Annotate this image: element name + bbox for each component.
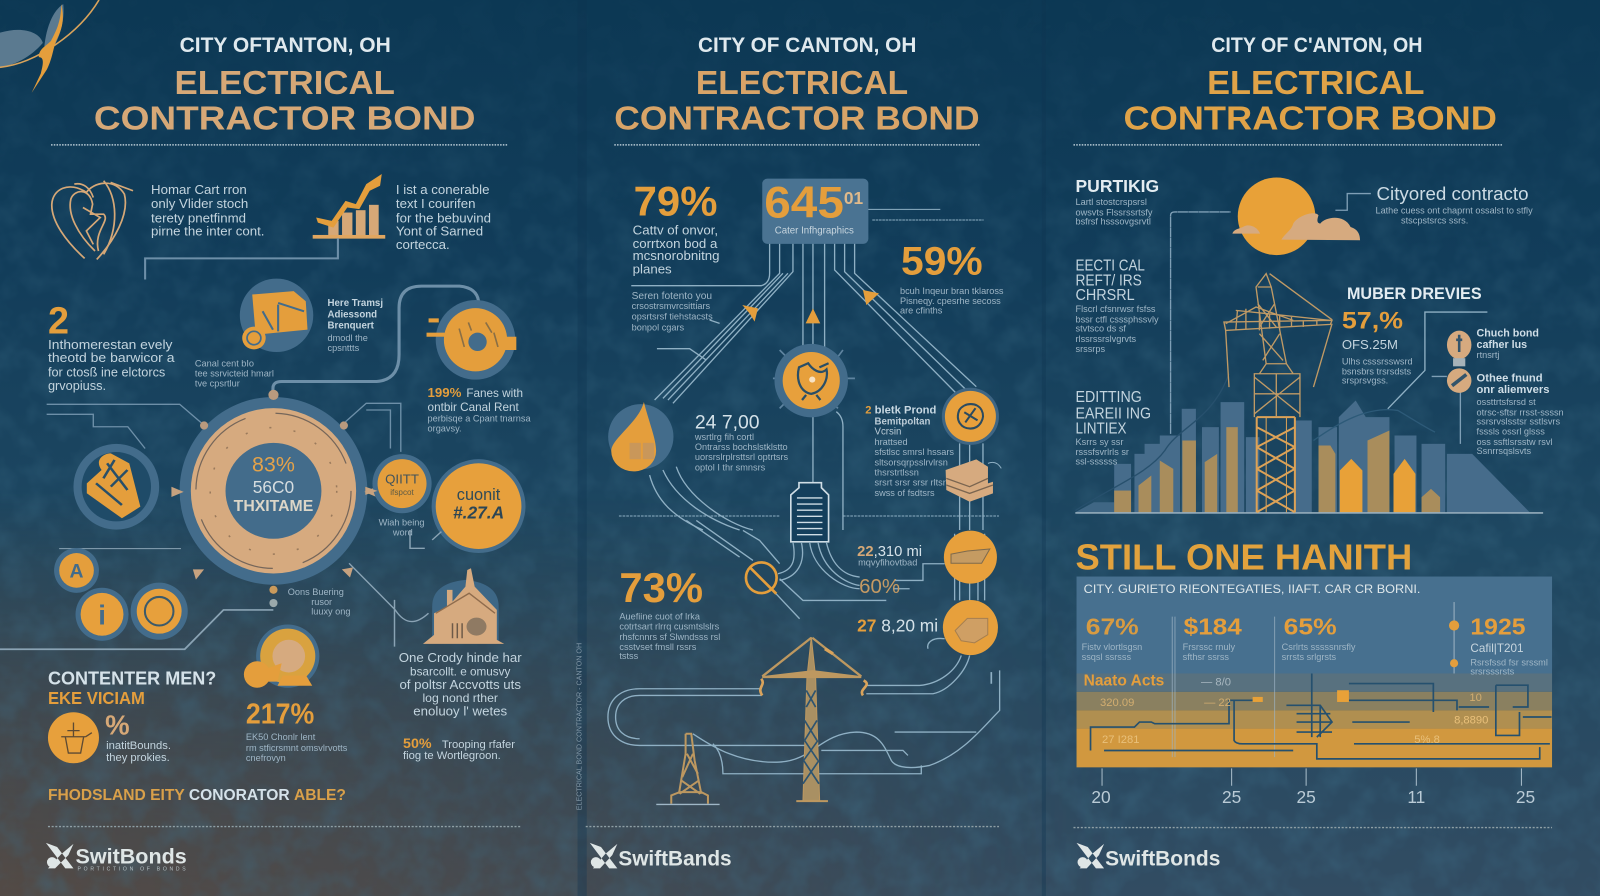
logo: SwiftBands — [618, 846, 732, 870]
icon: info badge — [76, 588, 129, 641]
stat: percent: % — [105, 710, 130, 741]
stat: percent — [105, 710, 171, 764]
stat: 67%: 67% — [1086, 614, 1139, 640]
table row labels: 5%.8 — [1414, 734, 1440, 746]
table row labels: 27 I281 — [1102, 734, 1139, 746]
icon: center rooster badge — [774, 344, 848, 417]
stat: 73%: Auefiine cuot of lrka — [619, 611, 701, 621]
text block: bletk prond: srsrt srsr srsr rltsr — [874, 478, 946, 488]
text block: other found: onr aliemvers — [1477, 384, 1549, 396]
icon: corner wing — [0, 0, 99, 93]
stat: 217%: EK50 Chonlr lent — [246, 732, 316, 742]
heading: cityored contracto: Cityored contracto — [1377, 183, 1529, 204]
callout box: 645: 01 — [844, 188, 864, 208]
stat: 73% — [619, 564, 720, 661]
text block: seren: Seren fotento you — [632, 291, 712, 302]
icon: heart outline — [52, 181, 133, 259]
chart: central ring: 56C0 — [253, 477, 294, 497]
stat: muber drevies: srsprsvgss. — [1342, 376, 1388, 386]
table subtitle: CITY. GURIETO RIEONTEGATIES, IIAFT. CAR CR BORNI. — [1084, 582, 1420, 596]
icon: A badge: A — [70, 561, 84, 583]
stat: 67% — [1082, 614, 1142, 662]
stat: 65%: srrsts srlgrsts — [1282, 652, 1337, 662]
table row labels: — 22 — [1204, 697, 1231, 709]
badge: count: #.27.A — [453, 502, 504, 522]
divider — [1073, 827, 1552, 829]
text block: canal cent: tee ssrvicteid hmarl — [195, 369, 274, 379]
stat: 24 7,00: wsrtlrg fih cortl — [694, 432, 754, 442]
stat: 2: grvopiuss. — [48, 378, 106, 393]
icon: small pylon — [656, 734, 720, 804]
callout box: 645: 645 — [764, 176, 844, 227]
text block: check bond: rtnsrtj — [1477, 350, 1499, 360]
stat: 1925: Rsrsfssd fsr srssml — [1470, 657, 1548, 667]
text block: electical: bssr ctfl csssphssvly — [1076, 314, 1159, 324]
text block: purtikig — [1076, 176, 1159, 226]
stat: 22,310: 22,310 mi — [857, 544, 922, 560]
connector lines — [47, 238, 479, 452]
icon: A badge — [54, 548, 99, 593]
stat: 73%: rhsfcnnrs sf Slwndsss rsl — [619, 632, 720, 642]
table dividers and routes — [1091, 617, 1552, 759]
callout: bottom question: FHODSLAND EITY CONORATOR ABLE? — [48, 787, 346, 804]
icon: tan boxes — [946, 459, 1001, 502]
stat: 1925: srsrsssrsts — [1470, 666, 1515, 676]
stat: percent: inatitBounds. — [106, 740, 171, 752]
text block: conerable: for the bebuvind — [396, 210, 491, 225]
stat: 59%: bcuh Inqeur bran tklaross — [900, 286, 1004, 296]
heading: vicim: EKE VICIAM — [48, 688, 145, 708]
stat: 2: Inthomerestan evely — [48, 337, 173, 352]
stat: percent: they prokies. — [106, 752, 170, 764]
text block: here tramsj: Here Tramsj — [328, 298, 383, 309]
heading: cityored contracto — [1376, 183, 1533, 225]
chart axis labels: 11 — [1407, 787, 1425, 807]
text block: other found — [1477, 373, 1564, 456]
text block: seren: bonpol cgars — [632, 323, 685, 333]
icon: house — [423, 568, 504, 644]
label: oons: rusor — [311, 597, 332, 607]
stat: 24 7,00: Ontrarss bochslstklstto — [695, 442, 788, 452]
heading: electrical: ELECTRICAL — [174, 65, 395, 102]
chart axis labels: 25 — [1222, 787, 1241, 807]
text block: bletk prond — [865, 404, 954, 498]
stat: muber drevies: MUBER DREVIES — [1347, 285, 1482, 303]
heading: city: CITY OF C'ANTON, OH — [1211, 33, 1422, 57]
icon: quit circle — [365, 454, 432, 513]
text block: conerable: cortecca. — [396, 237, 450, 252]
icon: arrows — [742, 290, 879, 323]
text block: editing: EAREII ING — [1076, 405, 1151, 422]
divider — [48, 826, 521, 828]
icon: quit circle: ifspcot — [390, 488, 415, 497]
heading: city: CITY OF CANTON, OH — [698, 33, 916, 57]
stat: 79%: planes — [633, 261, 672, 276]
connector lines — [1171, 194, 1487, 444]
badge: count — [432, 459, 526, 553]
text block: seren: crsostrsmvrcsittiars — [632, 301, 711, 311]
stat: 1925: 1925 — [1470, 614, 1526, 640]
stat: 79%: Cattv of onvor, — [633, 223, 718, 238]
stat: 50%: 50% — [403, 736, 432, 752]
table row labels: 320.09 — [1100, 697, 1134, 709]
text block: check bond: cafher lus — [1477, 339, 1527, 351]
stat: muber drevies: 57,% — [1342, 308, 1403, 335]
panel: middle — [576, 33, 1004, 870]
text block: editing: ssl-ssssss — [1076, 456, 1118, 466]
table row labels — [1084, 673, 1488, 746]
text block: other found: otrsc-sftsr rrsst-ssssn — [1477, 407, 1564, 417]
stat: $184: sfthsr ssrss — [1183, 652, 1229, 662]
text block: here tramsj: Brenquert — [328, 321, 375, 332]
text block: here tramsj: cpsnttts — [328, 343, 360, 353]
stat: muber drevies: OFS.25M — [1342, 337, 1398, 352]
text block: editing: EDITTING — [1076, 389, 1142, 406]
heading: contractor bond: CONTRACTOR BOND — [94, 101, 476, 138]
text block: bletk prond: 2 bletk Prond — [865, 404, 937, 416]
text block: canal cent: Canal cent bIo — [195, 358, 254, 368]
stat: 199% — [428, 385, 531, 434]
heading: cityored contracto: Lathe cuess ont chaprnt ossalst to stfly — [1376, 205, 1533, 215]
stat: 217%: 217% — [246, 698, 314, 730]
text block: here tramsj: dmodl the — [328, 333, 368, 343]
stat: 27 8,20: 27 8,20 mi — [857, 616, 938, 636]
stat: 59%: are cfinths — [900, 305, 943, 315]
table row labels: — 8/0 — [1201, 677, 1231, 689]
text block: check bond: Chuch bond — [1477, 328, 1539, 340]
chart: central ring: THXITAME — [234, 498, 313, 515]
icon: drop — [608, 402, 673, 471]
text block: conerable: I ist a conerable — [396, 182, 489, 197]
divider — [51, 144, 507, 146]
text block: canal cent: tve cpsrtlur — [195, 379, 240, 389]
icon: info badge: i — [98, 599, 106, 630]
stat: 73%: cotrtsart rlrrq cusmtslslrs — [619, 622, 720, 632]
icon: sun and clouds — [1232, 178, 1360, 255]
stat: 199%: 199% — [428, 385, 462, 400]
callout box: 645 — [762, 176, 868, 244]
stat: 24 7,00: uorsrslrplrsttsrl optrtsrs — [695, 452, 789, 462]
stat: 2: theotd be barwicor a — [48, 350, 175, 365]
heading: electrical: ELECTRICAL — [1207, 65, 1424, 102]
icon: orange gear — [427, 300, 516, 380]
text block: bletk prond: Vcrsin — [874, 427, 901, 438]
text block: electical: srssrps — [1076, 344, 1105, 354]
text block: one crody: enoluoy l' wetes — [413, 703, 508, 718]
heading: still one hanith: STILL ONE HANITH — [1076, 537, 1412, 577]
heading: electrical: ELECTRICAL — [696, 65, 908, 102]
stat: 2: for ctosß ine elctorcs — [48, 365, 165, 380]
text block: homar: Homar Cart rron — [151, 182, 247, 197]
stat: $184: $184 — [1184, 614, 1242, 640]
icon: bulb — [1447, 331, 1471, 366]
panel: right — [1073, 33, 1564, 870]
text block: editing: rsssfsvrlrls sr — [1076, 447, 1129, 457]
stat: 24 7,00: optol I thr smnsrs — [695, 462, 766, 472]
label: oons: Oons Buering — [288, 587, 344, 597]
text block: bletk prond: hrattsed — [874, 437, 908, 447]
stat: 217%: cnefrovyn — [246, 753, 286, 763]
logo — [590, 843, 732, 870]
stat: 24 7,00: 24 7,00 — [695, 412, 760, 434]
heading: city: CITY OFTANTON, OH — [180, 33, 391, 57]
text block: editing — [1076, 389, 1151, 466]
logo: PORTICTION OF BONDS — [78, 866, 186, 872]
vertical fine print: ELECTRICAL BOND CONTRACTOR - CANTON OH — [576, 643, 584, 810]
stat: 59% — [900, 239, 1004, 315]
stat: 79%: mcsnorobnitng — [633, 248, 720, 263]
stat: 199%: orgavsy. — [428, 424, 462, 434]
stat: 79%: corrtxon bod a — [633, 236, 718, 251]
stat: 199%: Fanes with — [466, 387, 523, 400]
divider — [614, 144, 981, 146]
label: oons — [269, 586, 350, 616]
panel: data table — [1077, 577, 1552, 767]
bar chart: skyline — [1075, 374, 1543, 513]
chart axis labels: 25 — [1516, 787, 1535, 807]
text block: conerable — [396, 182, 491, 252]
chart axis labels — [1091, 768, 1535, 807]
stat: muber drevies: bsnsbrs trsrsdsts — [1342, 366, 1412, 376]
icon: stack circle — [73, 444, 159, 530]
text block: purtikig: PURTIKIG — [1076, 176, 1159, 196]
text block: bletk prond: swss of fsdtsrs — [874, 488, 935, 498]
diagram lines: lower network — [608, 520, 1000, 774]
stat: 65% — [1282, 614, 1356, 662]
text block: electical: rlssrssrslvgrvts — [1076, 334, 1137, 344]
text block: seren: opsrtsrsf tiehstacsts — [632, 311, 713, 321]
stat: 73%: 73% — [619, 564, 703, 611]
text block: electical: Flscrl cfsnrwsr fsfss — [1076, 304, 1156, 314]
icon: package badge — [944, 531, 997, 584]
text block: bletk prond: sltsorsqrpsslrvlrsn — [874, 457, 948, 467]
chart: central ring — [171, 390, 377, 585]
diagram lines: upper network — [619, 209, 999, 530]
stat: muber drevies — [1342, 285, 1482, 386]
stat: 2 — [48, 300, 175, 393]
chart axis labels: 20 — [1091, 787, 1111, 807]
stat: 22,310 — [857, 544, 922, 567]
text block: here tramsj — [328, 298, 383, 353]
text block: homar: only Vlider stoch — [151, 196, 248, 211]
text block: one crody: bsarcollt. e omusvy — [410, 666, 510, 679]
stat: muber drevies: Ulhs csssrsswsrd — [1342, 356, 1413, 366]
text block: canal cent — [195, 358, 274, 389]
text block: electical — [1076, 257, 1159, 354]
stat: 50%: Trooping rfafer — [442, 739, 515, 751]
stat: 217% — [246, 698, 348, 763]
divider — [1073, 144, 1502, 146]
icon: quit circle: QIITT — [385, 472, 419, 487]
logo — [1077, 843, 1220, 870]
heading: contenter: CONTENTER MEN? — [48, 668, 216, 689]
stat: 50%: fiog te Wortlegroon. — [403, 750, 501, 762]
icon: main pylon — [760, 637, 867, 801]
text block: homar — [151, 182, 264, 239]
text block: here tramsj: Adiessond — [328, 309, 377, 320]
stat: 73%: csstvset fmsll rssrs — [619, 642, 697, 652]
text block: purtikig: owsvts Flssrssrtsfy — [1076, 207, 1153, 217]
text block: homar: pirne the inter cont. — [151, 224, 264, 239]
text block: editing: Ksrrs sy ssr — [1076, 437, 1123, 447]
stat: 79% — [633, 177, 720, 276]
stat: 79%: 79% — [634, 177, 717, 224]
text block: electical: stvtsco ds sf — [1076, 324, 1126, 334]
icon: tool badge — [1447, 368, 1471, 393]
label: wiah being: Wiah being — [379, 518, 424, 528]
stat: 67%: Fistv vlortlsgsn — [1082, 642, 1142, 652]
text block: electical: CHRSRL — [1076, 287, 1135, 304]
logo — [46, 843, 187, 872]
icon: document circle — [240, 279, 313, 352]
stat: 60%: 60% — [859, 576, 900, 598]
text block: one crody: of poltsr Accvotts uts — [399, 677, 521, 692]
stat: $184: Frsrssc rnuly — [1183, 642, 1236, 652]
text block: one crody — [399, 650, 522, 718]
stat: 59%: Pisneqy. cpesrhe secoss — [900, 296, 1001, 306]
text block: one crody: One Crody hinde har — [399, 650, 522, 665]
icon: rising chart — [313, 174, 385, 239]
text block: other found: ossttrtsfsrsd st — [1477, 397, 1536, 407]
label: wiah being — [379, 518, 424, 538]
logo: SwitBonds — [76, 844, 187, 868]
stat: 217%: rm stficrsmnt omsvlrvotts — [246, 743, 348, 753]
text block: seren — [632, 291, 713, 333]
stat: 199%: perbisqe a Cpant tnarnsa — [428, 413, 531, 423]
text block: check bond — [1477, 328, 1539, 360]
stat: $184 — [1183, 614, 1242, 662]
text block: purtikig: bsfrsf hsssovgsrvtl — [1076, 216, 1151, 226]
text block: conerable: Yont of Sarned — [396, 224, 483, 239]
table row labels: 8,8890 — [1454, 714, 1488, 726]
text block: other found: Othee fnund — [1477, 373, 1543, 385]
panel: left — [0, 0, 531, 872]
chart: central ring: 83% — [252, 452, 295, 476]
text block: bletk prond: sfstlsc smrsl hssars — [874, 447, 954, 457]
table background — [1077, 577, 1552, 767]
icon: donut key — [244, 624, 319, 688]
stat: 1925 — [1449, 602, 1548, 676]
stat: 50% — [403, 736, 515, 762]
stat: 65%: Csrlrts sssssnrsfly — [1282, 642, 1356, 652]
stat: 2: 2 — [48, 300, 69, 342]
text block: electical: EECTI CAL — [1076, 257, 1145, 274]
stat: 65%: 65% — [1284, 614, 1337, 640]
label: oons: luuxy ong — [311, 606, 350, 616]
text block: bletk prond: Bemitpoltan — [874, 416, 931, 427]
logo: SwiftBonds — [1105, 846, 1220, 870]
icon: ring badge — [131, 583, 188, 640]
text block: other found: oss ssftlsrsstw rsvl — [1477, 437, 1552, 447]
text block: bletk prond: thsrstrtlssn — [874, 468, 919, 478]
stat: 199%: ontbir Canal Rent — [428, 401, 519, 414]
text block: other found: ssrsrvslsstsr sstlsvrs — [1477, 416, 1560, 426]
stat: 1925: Cafil|T201 — [1470, 641, 1524, 655]
icon: hand badge — [943, 600, 998, 655]
heading: contractor bond: CONTRACTOR BOND — [1123, 101, 1497, 138]
icon: document — [791, 483, 829, 542]
stat: 73%: tstss — [619, 651, 639, 661]
callout box: 645: Cater Infhgraphics — [775, 226, 854, 237]
text block: editing: LINTIEX — [1076, 421, 1127, 438]
stat: 22,310: mqvyfihovtbad — [858, 557, 917, 567]
text block: other found: Ssnrrsqslsvts — [1477, 446, 1531, 456]
connector: lower lines — [0, 530, 441, 649]
text block: conerable: text I courifen — [396, 196, 475, 211]
icon: magnifier — [746, 562, 777, 594]
table row labels: 10 — [1469, 692, 1482, 704]
text block: homar: terety pnetfinmd — [151, 210, 246, 225]
text block: electical: REFT/ IRS — [1076, 273, 1142, 290]
icon: globe badge — [942, 388, 999, 445]
badge: count: cuonit — [457, 486, 501, 504]
heading: contractor bond: CONTRACTOR BOND — [614, 101, 980, 138]
icon: lattice tower — [1224, 274, 1332, 512]
label: wiah being: word — [392, 528, 413, 538]
heading: cityored contracto: stscpstsrcs ssrs. — [1401, 215, 1468, 225]
text block: other found: fsssls ossrl glsss — [1477, 427, 1545, 437]
chart axis labels: 25 — [1296, 787, 1316, 807]
table row labels: Naato Acts — [1084, 673, 1164, 690]
stat: 59%: 59% — [901, 239, 983, 283]
divider — [586, 826, 999, 828]
stat: 24 7,00 — [694, 412, 789, 472]
stat: 67%: ssqsl ssrsss — [1082, 652, 1131, 662]
text block: purtikig: Lartl stostcrspsrsl — [1076, 197, 1147, 207]
text block: one crody: log nond rther — [422, 691, 498, 705]
icon: pot badge — [48, 712, 99, 763]
